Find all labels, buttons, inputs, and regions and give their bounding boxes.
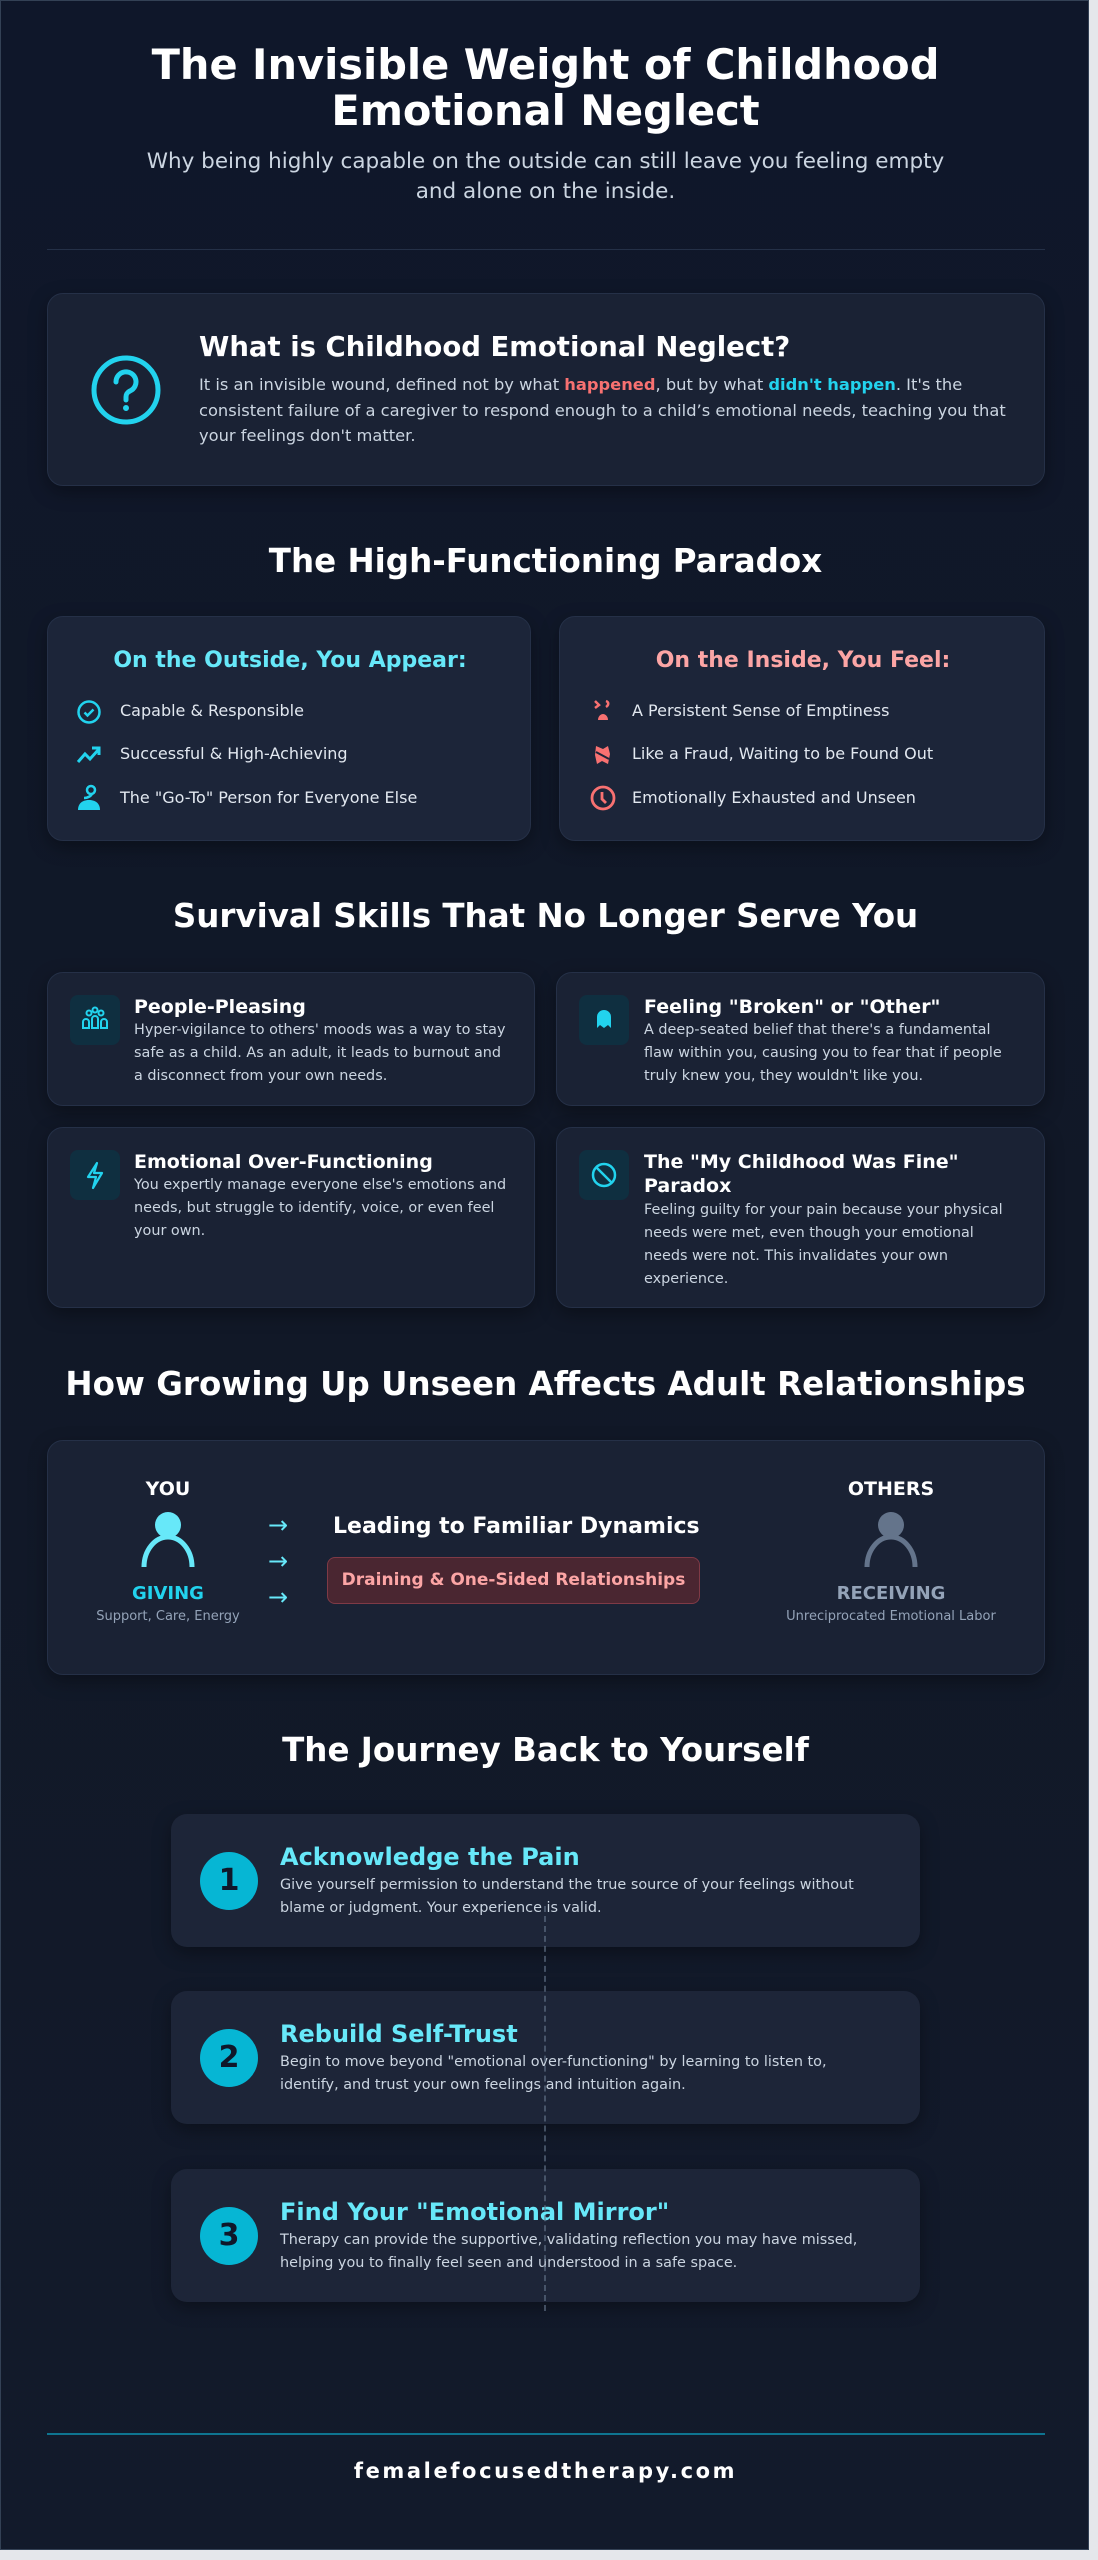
panel: my childhood was fine [556,1127,1045,1308]
step 2: Rebuild Self-Trust [280,2020,518,2048]
step 3 [171,2169,920,2302]
icon: person others [864,1512,918,1567]
body text: consistent failure of a caregiver to respond enough to a child’s emotional needs, teaching you that [199,400,1006,420]
subtitle: and alone on the inside. [416,179,675,204]
text [644,1202,1003,1287]
step 2: identify, and trust your own feelings and intuition again. [280,2077,686,2093]
title: The "My Childhood Was Fine" [644,1151,959,1173]
step 3: Therapy can provide the supportive, validating reflection you may have missed, [280,2232,857,2248]
step 3: Find Your "Emotional Mirror" [280,2198,669,2226]
text: leading to familiar dynamics: Leading to Familiar Dynamics [333,1514,700,1539]
title: Feeling "Broken" or "Other" [644,996,940,1018]
icon: ghost [579,995,629,1045]
heading: high-functioning paradox: The High-Functioning Paradox [269,542,822,580]
text: needs were met, even though your emotional [644,1225,974,1241]
step 1: 1 [219,1863,239,1898]
step 2 [171,1991,920,2124]
callout: draining relationships: Draining & One-Sided Relationships [342,1570,685,1590]
title: The Invisible Weight of Childhood [152,40,939,89]
panel: emotional over-functioning [47,1127,535,1308]
text: A deep-seated belief that there's a fundamental [644,1022,990,1038]
others column: OTHERS [848,1478,934,1500]
others column: RECEIVING [837,1583,945,1604]
title: People-Pleasing [134,996,306,1018]
title: Emotional Over-Functioning [134,1151,433,1173]
arrows: → [268,1583,288,1611]
icon: question mark [92,356,160,424]
text [134,1177,506,1239]
you column: Support, Care, Energy [96,1609,240,1624]
others column [786,1478,996,1624]
icon: lightning [70,1150,120,1200]
you column [96,1478,240,1624]
text: your own. [134,1223,205,1239]
text: a disconnect from your own needs. [134,1068,387,1084]
heading: What is Childhood Emotional Neglect? [199,331,790,363]
text: experience. [644,1271,728,1287]
body text: It is an invisible wound, defined not by what happened, but by what didn't happen. It's the [199,375,962,394]
list outside [77,700,417,810]
panel: people-pleasing [47,972,535,1106]
list inside: A Persistent Sense of Emptiness [632,701,889,720]
callout: draining relationships [327,1557,700,1604]
body text: your feelings don't matter. [199,426,416,445]
step 3: helping you to finally feel seen and understood in a safe space. [280,2255,737,2271]
panel: feeling broken [556,972,1045,1106]
step 2: Begin to move beyond "emotional over-functioning" by learning to listen to, [280,2054,827,2070]
subtitle [147,149,944,204]
footer: femalefocusedtherapy.com [354,2459,737,2483]
body text [199,375,1006,445]
heading outside: On the Outside, You Appear: [113,648,467,673]
heading: relationships: How Growing Up Unseen Affects Adult Relationships [65,1365,1026,1403]
icon: person you [142,1512,194,1567]
text [644,1022,1002,1084]
text: safe as a child. As an adult, it leads to burnout and [134,1045,501,1061]
text [134,1022,506,1084]
step 1 [171,1814,920,1947]
step 3: 3 [219,2218,239,2253]
list outside: Successful & High-Achieving [120,744,348,763]
text: Feeling guilty for your pain because your physical [644,1202,1003,1218]
list inside: Emotionally Exhausted and Unseen [632,788,916,807]
text: truly knew you, they wouldn't like you. [644,1068,923,1084]
list outside: The "Go-To" Person for Everyone Else [120,788,417,807]
list inside [590,700,933,810]
icon: people [70,995,120,1045]
text: Hyper-vigilance to others' moods was a way to stay [134,1022,506,1038]
subtitle: Why being highly capable on the outside can still leave you feeling empty [147,149,944,174]
arrows: → [268,1547,288,1575]
heading inside: On the Inside, You Feel: [656,648,950,673]
text: flaw within you, causing you to fear that if people [644,1045,1002,1061]
step 1: Acknowledge the Pain [280,1843,580,1871]
step 1: blame or judgment. Your experience is valid. [280,1900,602,1916]
text: needs were not. This invalidates your own [644,1248,948,1264]
others column: Unreciprocated Emotional Labor [786,1609,996,1624]
arrows: → [268,1511,288,1539]
heading: journey: The Journey Back to Yourself [282,1731,809,1769]
title [152,40,939,135]
step 1: Give yourself permission to understand the true source of your feelings without [280,1877,854,1893]
panel: what is childhood emotional neglect [47,293,1045,486]
text: needs, but struggle to identify, voice, or even feel [134,1200,494,1216]
panel: relationships diagram [47,1440,1045,1675]
text: You expertly manage everyone else's emotions and [134,1177,506,1193]
you column: YOU [146,1478,190,1500]
step 2: 2 [219,2040,239,2075]
list outside: Capable & Responsible [120,701,304,720]
heading: survival skills: Survival Skills That No Longer Serve You [173,897,918,935]
panel: inside [559,616,1045,841]
arrows [268,1511,288,1611]
title: Paradox [644,1175,731,1197]
you column: GIVING [132,1583,204,1604]
icon: prohibited [579,1150,629,1200]
panel: outside [47,616,531,841]
title: Emotional Neglect [331,86,760,135]
title [644,1151,959,1197]
list inside: Like a Fraud, Waiting to be Found Out [632,744,933,763]
